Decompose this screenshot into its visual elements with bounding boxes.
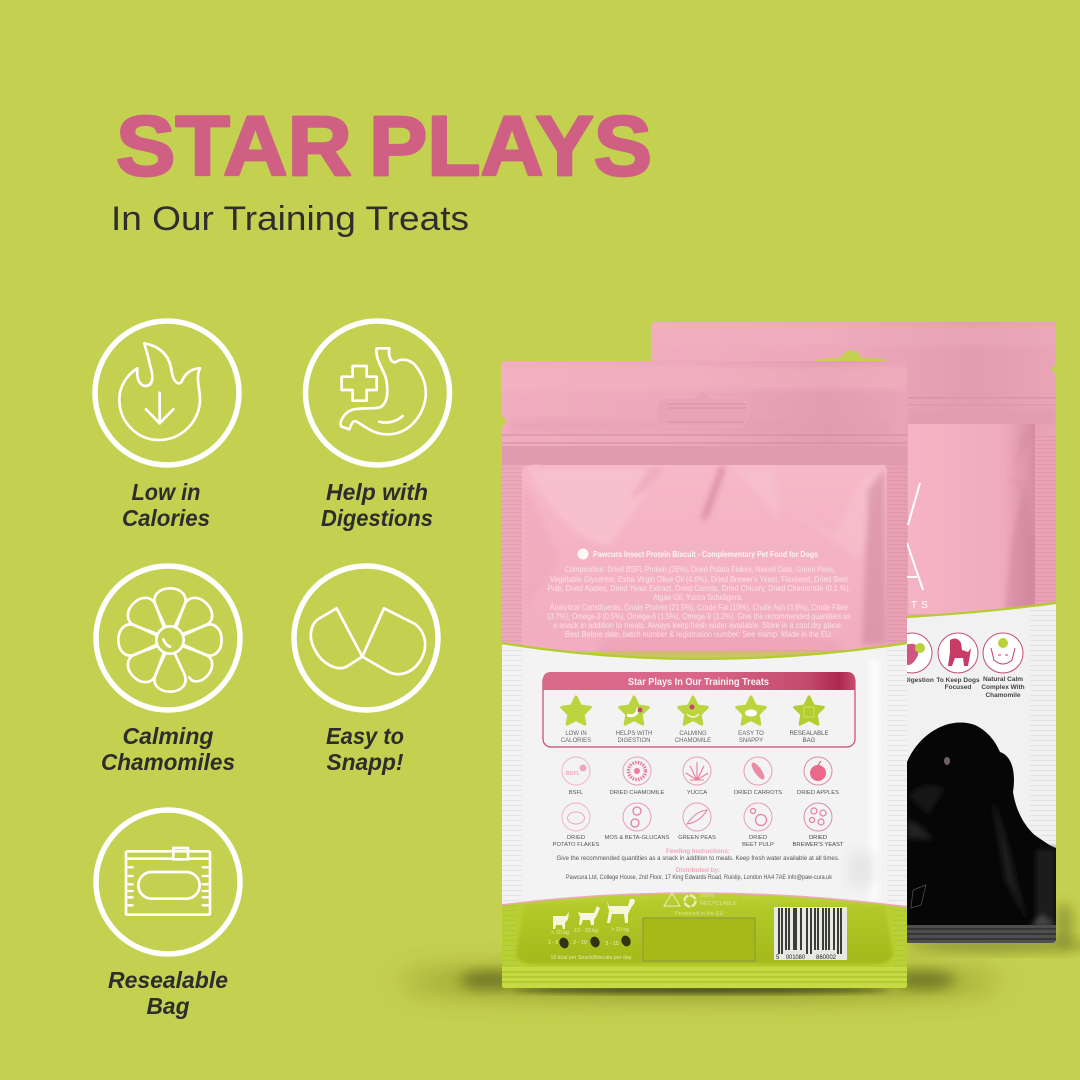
barcode — [774, 907, 847, 961]
star: resealable bag: RESEALABLE — [789, 731, 829, 737]
ingredient: dried brewers yeast: DRIED — [809, 835, 827, 841]
badge: calm complex: Complex With — [981, 684, 1025, 691]
star: helps with digestion: DIGESTION — [617, 738, 651, 744]
label: help with digestions: Digestions — [321, 505, 433, 531]
ingredient: dried beet pulp: BEET PULP — [742, 842, 774, 848]
front bag: product description: (3.7%), Omega-3 (0.5%), Omega-6 (1.5%), Omega-9 (3.2%). Give the recommended quantities as — [548, 612, 850, 621]
panel heading: Star Plays In Our Training Treats — [628, 676, 769, 688]
star: easy to snappy: EASY TO — [738, 731, 764, 737]
back bag: pink upper — [651, 322, 1056, 622]
star: calming chamomile: CHAMOMILE — [675, 738, 711, 744]
ingredient: dried carrots: DRIED CARROTS — [734, 790, 782, 796]
large dog — [607, 899, 635, 923]
dog size feeding guide — [548, 899, 635, 961]
ingredient: dried potato flakes: DRIED — [567, 835, 585, 841]
hang hole — [656, 391, 748, 427]
label: low in calories: Calories — [122, 505, 210, 531]
label: help with digestions: Help with — [326, 479, 428, 505]
front bag: product description: Pawcura Insect Protein Biscuit - Complementary Pet Food for Dogs — [593, 549, 818, 559]
ground shadow — [400, 903, 1080, 995]
front bag: white middle — [501, 643, 908, 910]
dog size feeding guide: < 10 kg — [551, 930, 569, 936]
label: resealable bag: Resealable — [108, 967, 228, 993]
back bag: pack wordmark fragments — [907, 482, 928, 608]
front bag — [501, 361, 908, 990]
front bag: product description: Best Before date, batch number & registration number: See stamp. Made in the EU. — [565, 630, 833, 639]
front bag: green wave — [501, 643, 908, 659]
front bag: product description: Vegetable Glycerine, Extra Virgin Olive Oil (4.6%), Dried Brewer's Yeast, Flaxseed, Dried Beet — [550, 575, 849, 584]
dog size feeding guide: 2 - 10 — [573, 940, 587, 946]
front bag: product description: Composition: Dried BSFL Protein (26%), Dried Potato Flakes, Naked Oats, Green Peas, — [565, 565, 835, 574]
back bag: benefit badges — [907, 632, 1024, 697]
front bag: pink upper — [501, 361, 908, 656]
ingredient: yucca — [683, 757, 711, 796]
icon: flame with down arrow — [95, 321, 239, 465]
feeding instructions: Feeding Instructions: — [666, 848, 730, 855]
ingredient icons — [553, 757, 844, 848]
dog size feeding guide: 3 - 15 — [605, 941, 619, 947]
ingredient: BSFL — [562, 757, 590, 796]
back bag: white middle — [907, 603, 1056, 943]
ingredient: green peas — [678, 803, 716, 841]
ingredient: dried potato flakes — [553, 803, 599, 848]
feature: calming chamomiles — [96, 566, 240, 775]
badge: calm complex — [981, 633, 1025, 699]
star: calming chamomile: CALMING — [679, 731, 707, 737]
dog size feeding guide: 10 kcal per Snack/Biscuits per day — [551, 955, 632, 961]
panel: star plays — [543, 672, 855, 747]
back bag: pack wordmark fragments: TS — [911, 600, 932, 611]
dog size feeding guide: 1 - 5 — [548, 940, 558, 946]
icon: snapped biscuit — [294, 566, 438, 710]
star: resealable bag: BAG — [803, 738, 816, 744]
star: low in calories: CALORIES — [561, 738, 591, 744]
feature: low in calories — [95, 321, 239, 531]
back bag — [651, 322, 1056, 943]
icon: chamomile flower — [96, 566, 240, 710]
medium dog — [578, 906, 600, 925]
barcode: 5 — [776, 955, 780, 961]
front bag: product description: Analytical Constituents: Crude Protein (21.5%), Crude Fat (10%), Crude Ash (3.8%), Crude Fibre — [550, 603, 848, 612]
star: calming chamomile — [675, 697, 711, 744]
back bag: green wave — [907, 603, 1056, 617]
ingredient: green peas: GREEN PEAS — [678, 835, 716, 841]
batch stamp box — [643, 918, 755, 961]
ingredient: yucca: YUCCA — [687, 790, 707, 796]
ingredient: MOS and beta-glucans: MOS & BETA-GLUCANS — [605, 835, 670, 841]
feeding instructions — [556, 848, 840, 862]
barcode: 860002 — [816, 955, 837, 961]
badge: focused dog: Focused — [945, 684, 971, 691]
label: easy to snapp: Easy to — [326, 723, 404, 749]
back bag: bottom seal — [907, 914, 1056, 943]
recycling marks: RECYCLABLE — [700, 901, 737, 907]
ingredient: dried brewers yeast: BREWER'S YEAST — [793, 842, 844, 848]
icon: stomach with cross — [306, 321, 450, 465]
dog size feeding guide: > 20 kg — [611, 927, 629, 933]
panel heading — [543, 672, 855, 690]
subtitle: In Our Training Treats — [111, 200, 469, 238]
pink pouch folds — [522, 466, 887, 656]
label: resealable bag: Bag — [146, 993, 190, 1019]
distributor — [566, 867, 833, 881]
recycling marks — [664, 893, 737, 917]
ingredient: BSFL: BSFL — [566, 771, 581, 777]
front bag: product description: Algae Oil, Yucca Schidigera. — [653, 593, 743, 602]
back bag: black dog photo — [907, 723, 1056, 926]
star: easy to snappy — [737, 697, 765, 744]
front bag: product description: a snack in addition to meals. Always keep fresh water available. Store in a cool dry place. — [553, 621, 843, 630]
distributor: Pawcura Ltd, College House, 2nd Floor, 17 King Edwards Road, Ruislip, London HA4 7AE info@paw-cura.uk — [566, 874, 833, 881]
front bag: product description: Pulp, Dried Apples, Dried Yeast Extract, Dried Carrots, Dried Chicory, Dried Chamomile (0.1 %), — [548, 584, 850, 593]
ingredient: dried apples — [797, 757, 839, 796]
star: easy to snappy: SNAPPY — [739, 738, 763, 744]
badge: calm complex: Natural Calm — [983, 676, 1023, 683]
badge: digestion: Digestion — [904, 677, 934, 684]
feeding instructions: Give the recommended quantities as a snack in addition to meals. Keep fresh water available at all times. — [556, 855, 840, 862]
title: PLAYS — [369, 99, 652, 194]
icon: resealable bag — [96, 810, 240, 954]
recycling marks: Produced in the EU — [675, 911, 724, 917]
title — [116, 99, 652, 194]
ingredient: MOS and beta-glucans — [605, 803, 670, 841]
star: resealable bag — [789, 697, 829, 744]
ingredient: dried chamomile: DRIED CHAMOMILE — [610, 790, 665, 796]
label: calming chamomiles: Chamomiles — [101, 749, 235, 775]
ingredient: dried brewers yeast — [793, 803, 844, 848]
title: STAR — [116, 99, 352, 193]
badge: focused dog: To Keep Dogs — [936, 677, 980, 684]
ingredient: dried beet pulp — [742, 803, 774, 848]
badge: focused dog — [936, 633, 980, 691]
star: helps with digestion: HELPS WITH — [616, 731, 652, 737]
label: calming chamomiles: Calming — [122, 723, 214, 749]
distributor: Distributed by: — [676, 867, 720, 874]
front bag: product description — [548, 548, 850, 639]
feature: easy to snapp — [294, 566, 438, 775]
label: low in calories: Low in — [132, 479, 200, 505]
ingredient: dried apples: DRIED APPLES — [797, 790, 839, 796]
ingredient: dried potato flakes: POTATO FLAKES — [553, 842, 599, 848]
ingredient: dried beet pulp: DRIED — [749, 835, 767, 841]
feature: help with digestions — [306, 321, 450, 531]
label: easy to snapp: Snapp! — [326, 749, 404, 775]
dog size feeding guide: 10 - 20 kg — [574, 928, 598, 934]
front bag: green base — [501, 893, 908, 990]
ingredient: dried carrots — [734, 757, 782, 796]
barcode: 001080 — [786, 955, 806, 961]
ingredient: BSFL: BSFL — [569, 790, 584, 796]
recycling marks: 100% — [700, 893, 714, 899]
badge: calm complex: Chamomile — [985, 692, 1021, 699]
star: low in calories: LOW IN — [565, 731, 587, 737]
star: low in calories — [561, 697, 591, 744]
feature: resealable bag — [96, 810, 240, 1019]
small dog — [553, 912, 569, 929]
ingredient: dried chamomile — [610, 757, 665, 796]
star: helps with digestion — [616, 697, 652, 744]
